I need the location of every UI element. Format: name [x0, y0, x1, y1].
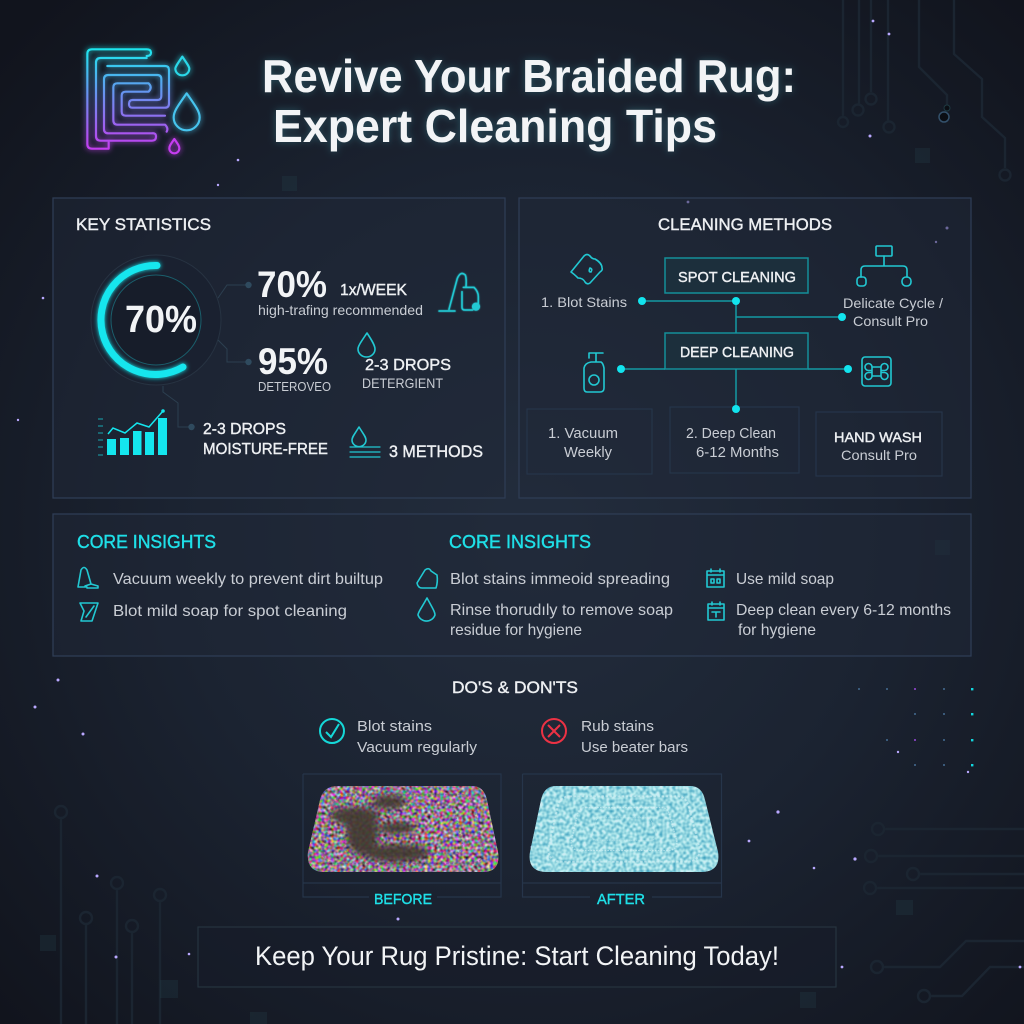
do list: Vacuum regularly — [357, 739, 478, 756]
label: blot stains: 1. Blot Stains — [541, 294, 627, 310]
title: Expert Cleaning Tips — [273, 100, 717, 152]
icon: drop with waves — [350, 427, 380, 457]
heading: do's and don'ts: DO'S & DON'TS — [452, 678, 578, 697]
icon: cross — [542, 719, 566, 743]
label: after: AFTER — [597, 891, 645, 908]
dot grid decoration — [858, 688, 973, 766]
icon: vacuum small — [78, 568, 98, 588]
icon: vacuum — [439, 273, 479, 311]
stat: 70% weekly: 70% — [257, 264, 327, 305]
box: vacuum weekly: 1. Vacuum — [548, 426, 618, 442]
box: spot cleaning: SPOT CLEANING — [678, 269, 796, 286]
panel: key statistics — [53, 198, 505, 498]
bar chart icon — [98, 409, 167, 455]
box: deep clean — [670, 407, 799, 473]
donut chart: 70%: 70% — [125, 299, 197, 341]
icon: command key — [862, 357, 891, 386]
stat: 70% weekly — [257, 264, 423, 318]
heading: key statistics: KEY STATISTICS — [76, 215, 211, 234]
call to action banner — [198, 927, 836, 987]
dark speck artifact — [939, 105, 950, 122]
icon: network — [857, 246, 911, 286]
donut chart: 70% — [91, 255, 221, 385]
box: hand wash: HAND WASH — [834, 429, 922, 445]
label: delicate cycle — [843, 295, 943, 329]
stat: 95%: 95% — [258, 341, 328, 382]
stat: moisture-free: 2-3 DROPS — [203, 421, 286, 438]
rug: clean braided rug — [530, 786, 718, 872]
stat: moisture-free — [203, 421, 328, 458]
panel: core insights — [53, 514, 971, 656]
after panel — [522, 774, 722, 908]
icon: detergent drop — [358, 333, 375, 357]
do list — [357, 718, 478, 756]
box: hand wash: Consult Pro — [841, 447, 917, 463]
stat: 95%: DETEROVEO — [258, 379, 331, 394]
heading: core insights left: CORE INSIGHTS — [77, 532, 216, 552]
insight: use mild soap: Use mild soap — [736, 571, 834, 588]
insight: blot stains: Blot stains immeoid spreading — [450, 571, 670, 588]
before panel — [303, 774, 501, 908]
logo: braided rug with water drops — [87, 49, 200, 153]
heading: cleaning methods: CLEANING METHODS — [658, 215, 832, 234]
stat: detergent drops: 2-3 DROPS — [365, 357, 451, 374]
heading: core insights right: CORE INSIGHTS — [449, 532, 591, 552]
title — [262, 50, 796, 152]
stat: moisture-free: MOISTURE-FREE — [203, 441, 328, 458]
don't list: Rub stains — [581, 718, 654, 735]
box: vacuum weekly — [527, 409, 652, 474]
icon: check — [320, 719, 344, 743]
flow connectors — [617, 297, 852, 413]
icon: cloth — [571, 254, 602, 284]
insight: rinse thoroughly — [450, 602, 673, 639]
box: deep cleaning: DEEP CLEANING — [680, 344, 794, 361]
insight: deep clean: for hygiene — [738, 622, 816, 639]
connectors from donut to stats — [163, 282, 252, 430]
insight: vacuum weekly: Vacuum weekly to prevent dirt builtup — [113, 571, 383, 588]
label: delicate cycle: Delicate Cycle / — [843, 295, 943, 311]
do list: Blot stains — [357, 718, 432, 735]
box: vacuum weekly: Weekly — [564, 445, 613, 461]
don't list — [581, 718, 688, 756]
faint background squares — [40, 148, 950, 1024]
label: delicate cycle: Consult Pro — [853, 313, 928, 329]
box: deep clean: 6-12 Months — [696, 445, 779, 461]
icon: calendar — [707, 569, 724, 587]
insight: rinse thoroughly: residue for hygiene — [450, 622, 582, 639]
stat: 3 methods: 3 METHODS — [389, 442, 483, 461]
insight: blot mild soap: Blot mild soap for spot cleaning — [113, 603, 347, 620]
box: spot cleaning — [665, 258, 808, 293]
stat: 70% weekly: 1x/WEEK — [340, 282, 407, 299]
icon: glove — [417, 569, 437, 588]
icon: cloth small — [80, 603, 98, 621]
label: before: BEFORE — [374, 891, 432, 908]
icon: water drop — [418, 598, 435, 621]
title: Revive Your Braided Rug: — [262, 50, 796, 102]
box: deep cleaning — [665, 333, 808, 369]
stat: detergent drops — [362, 357, 451, 391]
stat: 70% weekly: high-trafing recommended — [258, 302, 423, 318]
don't list: Use beater bars — [581, 739, 688, 756]
insight: rinse thoroughly: Rinse thorudıly to remove soap — [450, 602, 673, 619]
panel: cleaning methods — [519, 198, 971, 498]
insight: deep clean — [736, 602, 951, 639]
insight: deep clean: Deep clean every 6-12 months — [736, 602, 951, 619]
rug: dirty braided rug — [308, 786, 498, 872]
box: hand wash — [816, 412, 942, 476]
box: deep clean: 2. Deep Clean — [686, 426, 776, 442]
icon: calendar small — [708, 602, 724, 620]
icon: soap bottle — [584, 353, 604, 392]
call to action banner: Keep Your Rug Pristine: Start Cleaning Today! — [255, 941, 779, 971]
stat: detergent drops: DETERGIENT — [362, 375, 443, 391]
